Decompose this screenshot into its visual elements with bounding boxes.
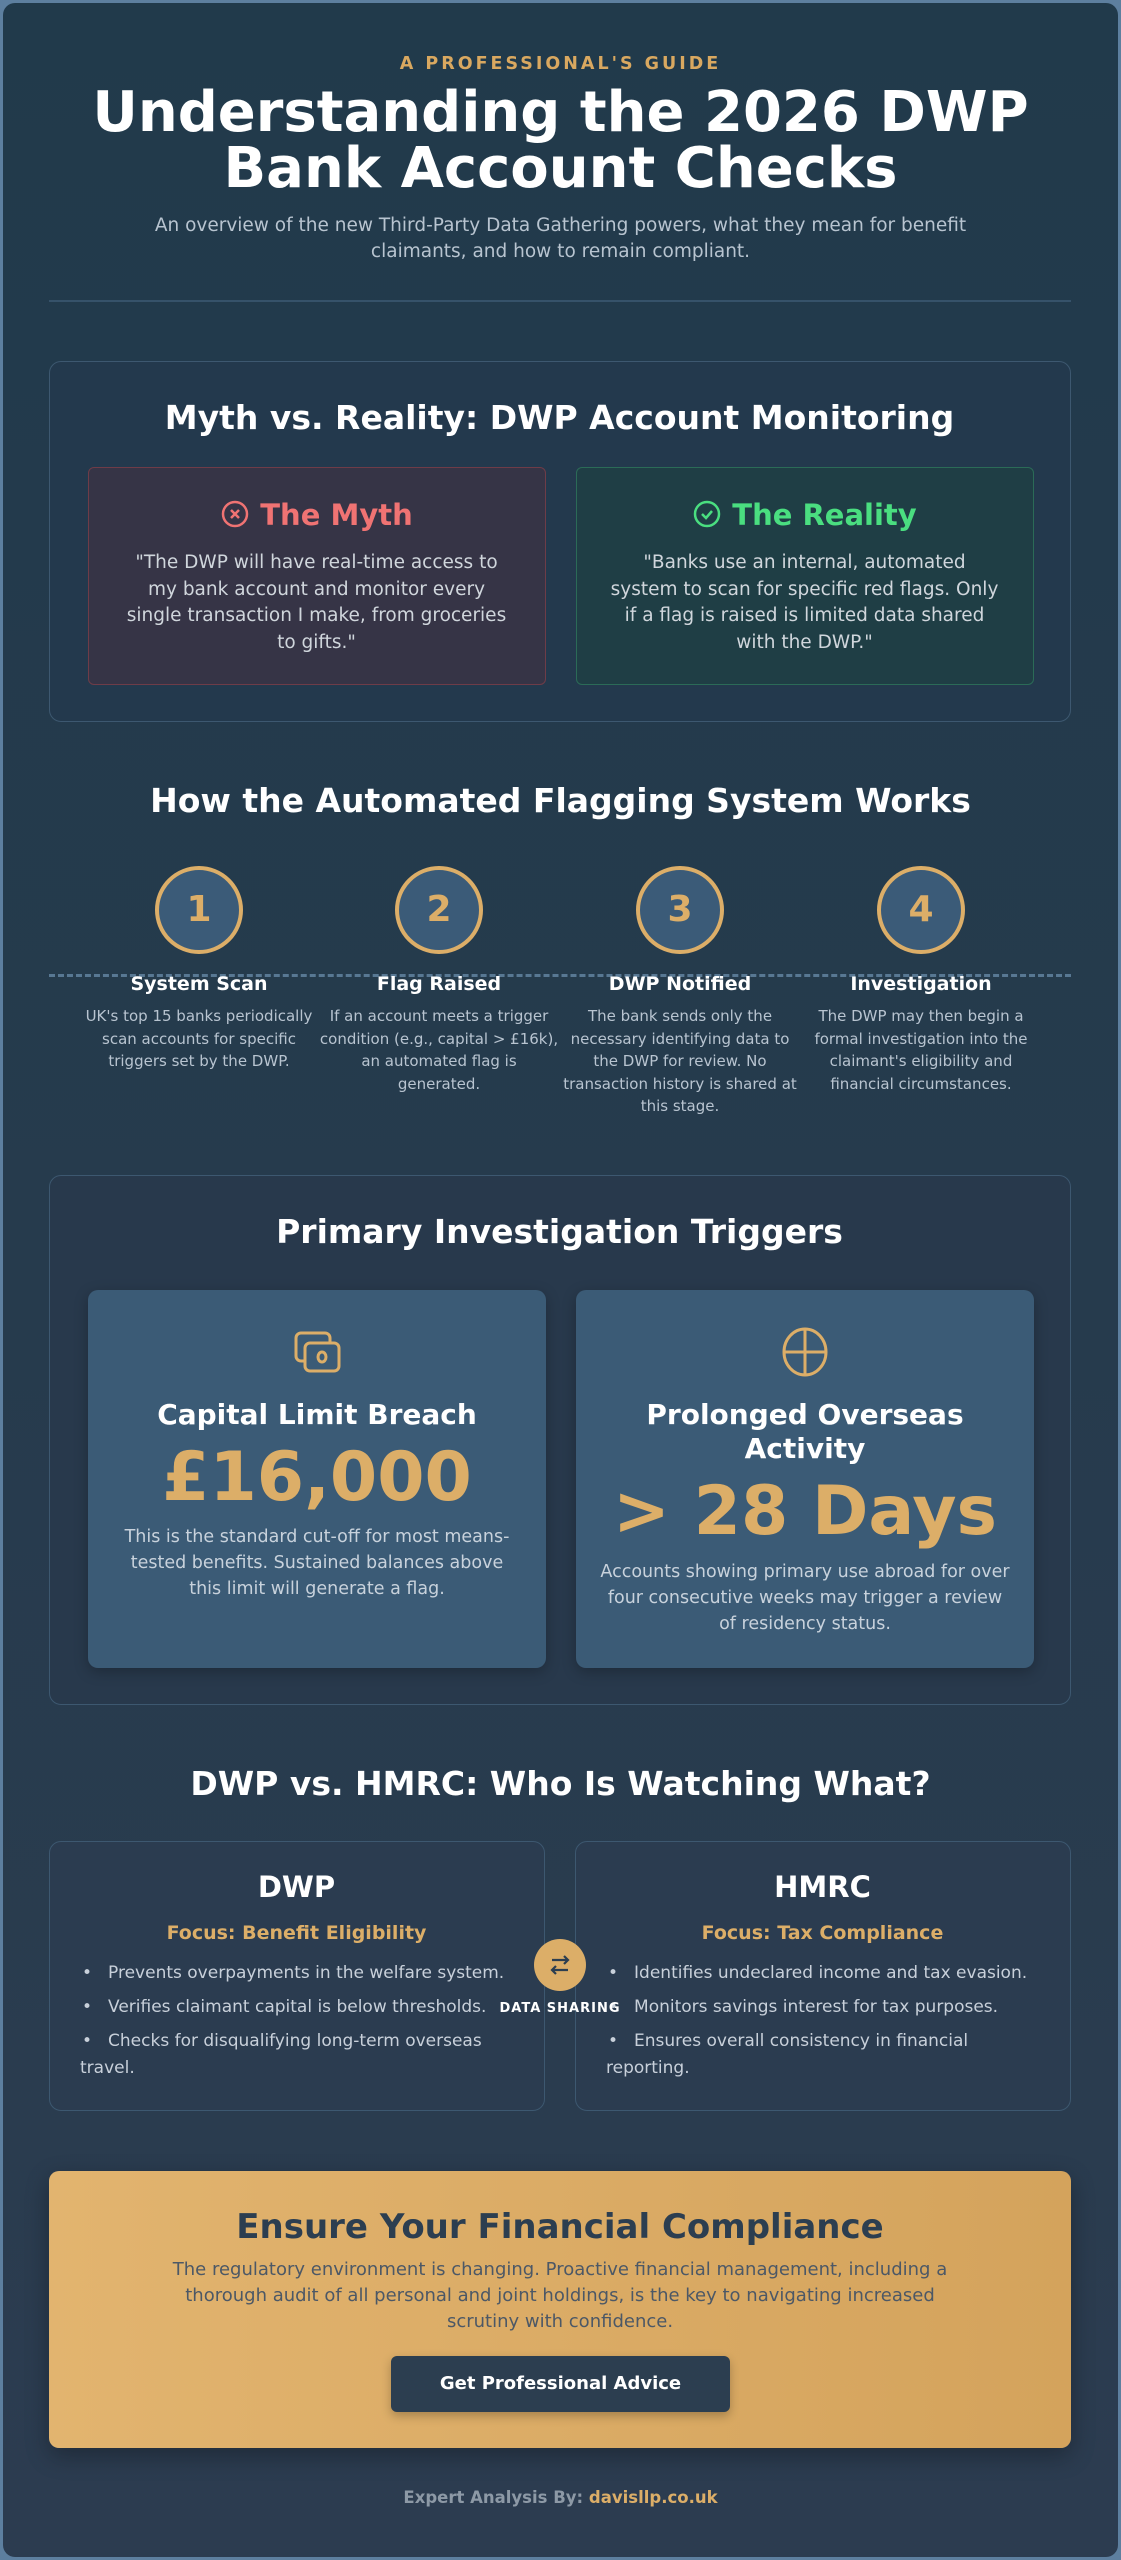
reality title: The Reality [732, 498, 917, 532]
card: hmrc: HMRC [774, 1870, 871, 1904]
panel: triggers [49, 1175, 1071, 1705]
step 1: System Scan [130, 973, 268, 995]
step 4: 4 [908, 889, 934, 930]
step 3: 3 [667, 889, 693, 930]
hmrc bullets: Monitors savings interest for tax purposes. [634, 1997, 998, 2017]
step 3: DWP Notified [609, 973, 751, 995]
myth title: The Myth [260, 498, 413, 532]
myth text: "The DWP will have real-time access to my bank account and monitor every single transaction I make, from groceries to gifts." [127, 552, 506, 652]
overseas text: of residency status. [719, 1614, 891, 1634]
callout: compliance: The regulatory environment is changing. Proactive financial management, including a thorough audit of all personal and joint holdings, is the key to navigating increased scrutiny with confidence. [173, 2259, 947, 2332]
icon: data sharing [500, 1939, 620, 2016]
icon: globe [782, 1328, 828, 1376]
title [92, 80, 1029, 201]
dwp bullets: Checks for disqualifying long-term overseas travel. [80, 2031, 482, 2078]
card: capital [88, 1290, 546, 1668]
stat: 16000: £16,000 [162, 1438, 472, 1517]
dwp bullets: Prevents overpayments in the welfare system. [108, 1963, 504, 1983]
intro text: An overview of the new Third-Party Data Gathering powers, what they mean for benefit claimants, and how to remain compliant. [155, 215, 966, 262]
button [391, 2356, 730, 2412]
step 4: The DWP may then begin a formal investigation into the claimant's eligibility and financial circumstances. [814, 1007, 1028, 1092]
overseas title [646, 1398, 964, 1465]
card: dwp: DWP [258, 1870, 335, 1904]
step 2: 2 [426, 889, 452, 930]
heading: triggers: Primary Investigation Triggers [276, 1212, 843, 1251]
overseas text [600, 1562, 1010, 1634]
callout: compliance: Ensure Your Financial Compliance [236, 2207, 884, 2247]
step 1: UK's top 15 banks periodically scan accounts for specific triggers set by the DWP. [86, 1007, 312, 1070]
step 2: generated. [398, 1074, 480, 1092]
step 4 [814, 866, 1028, 1092]
hmrc bullets [606, 1963, 1027, 2078]
overseas title: Prolonged Overseas [646, 1398, 964, 1431]
step 3: The bank sends only the necessary identifying data to the DWP for review. No transaction history is shared at this stage. [563, 1007, 797, 1115]
card: hmrc: Focus: Tax Compliance [702, 1922, 943, 1944]
card: dwp [49, 1841, 545, 2111]
step 1 [86, 866, 312, 1070]
dwp bullets: Verifies claimant capital is below thresholds. [108, 1997, 486, 2017]
footer: Expert Analysis By: davisllp.co.uk [403, 2488, 718, 2507]
overseas title: Activity [745, 1432, 865, 1465]
capital title: Capital Limit Breach [157, 1398, 477, 1431]
reality text: "Banks use an internal, automated system to scan for specific red flags. Only if a flag is raised is limited data shared with the DWP." [611, 552, 998, 652]
capital text: This is the standard cut-off for most means-tested benefits. Sustained balances above this limit will generate a flag. [125, 1527, 509, 1599]
step 1: 1 [186, 889, 212, 930]
card: myth [88, 467, 546, 685]
title: Understanding the 2026 DWP [92, 80, 1029, 145]
step 2: If an account meets a trigger condition (e.g., capital > £16k), an automated flag is [320, 1007, 558, 1070]
icon: data sharing: DATA SHARING [500, 2001, 620, 2016]
card: reality [576, 467, 1034, 685]
title: Bank Account Checks [224, 136, 898, 201]
eyebrow: A PROFESSIONAL'S GUIDE [400, 54, 721, 74]
overseas text: Accounts showing primary use abroad for over [600, 1562, 1010, 1582]
heading: dwp vs hmrc: DWP vs. HMRC: Who Is Watching What? [190, 1764, 931, 1803]
step 2: Flag Raised [377, 973, 501, 995]
heading: flagging system: How the Automated Flagging System Works [150, 781, 971, 820]
card: overseas [576, 1290, 1034, 1668]
overseas text: four consecutive weeks may trigger a review [608, 1588, 1002, 1608]
icon: cash [294, 1332, 340, 1372]
step 2 [320, 866, 558, 1092]
panel: myth vs reality [49, 361, 1071, 722]
card: hmrc [575, 1841, 1071, 2111]
dwp bullets [80, 1963, 504, 2078]
step 3 [563, 866, 797, 1115]
card: dwp: Focus: Benefit Eligibility [167, 1922, 426, 1944]
button: Get Professional Advice [440, 2373, 681, 2394]
stat: 28 days: > 28 Days [613, 1472, 997, 1551]
heading: myth vs reality: Myth vs. Reality: DWP Account Monitoring [165, 398, 954, 437]
hmrc bullets: Identifies undeclared income and tax evasion. [634, 1963, 1027, 1983]
callout: compliance [49, 2171, 1071, 2448]
hmrc bullets: Ensures overall consistency in financial reporting. [606, 2031, 968, 2078]
step 4: Investigation [850, 973, 992, 995]
